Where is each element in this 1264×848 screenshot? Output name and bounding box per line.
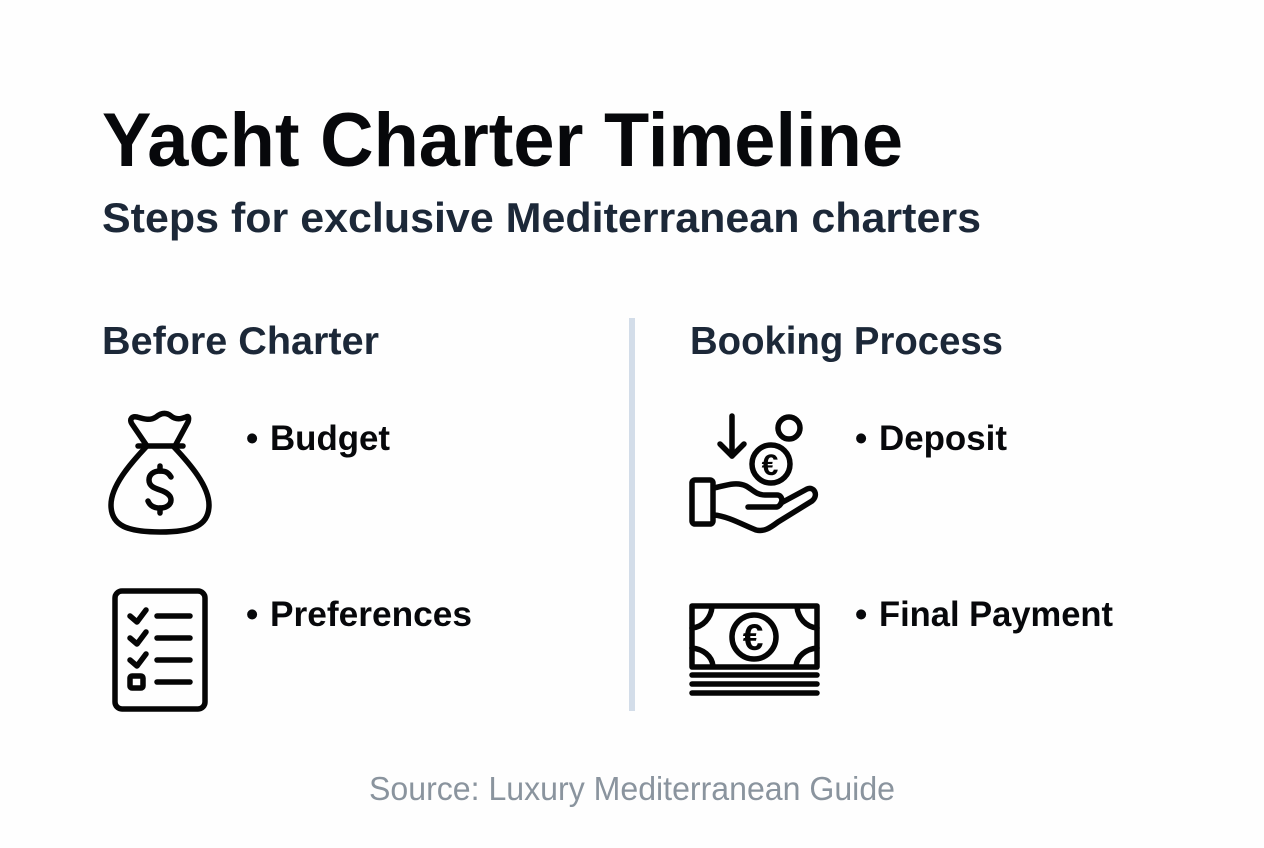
icon: banknote stack: € [743, 617, 763, 658]
heading: booking process: Booking Process [690, 320, 1003, 363]
icon: hand with coins: € [762, 449, 779, 482]
bullet: deposit: Deposit [879, 419, 1007, 458]
bullet: deposit: • [855, 419, 867, 458]
source note: Source: Luxury Mediterranean Guide [369, 770, 895, 807]
subtitle: Steps for exclusive Mediterranean charters [102, 194, 981, 241]
heading: before charter: Before Charter [102, 320, 379, 363]
icon: checklist [115, 591, 205, 709]
bullet: final payment: Final Payment [879, 595, 1113, 634]
column divider [629, 318, 635, 711]
bullet: final payment: • [855, 595, 867, 634]
bullet: budget: • [246, 419, 258, 458]
icon: banknote stack [692, 606, 817, 693]
bullet: preferences: Preferences [270, 595, 472, 634]
bullet: budget: Budget [270, 419, 390, 458]
title: Yacht Charter Timeline [102, 98, 903, 183]
icon: money bag [111, 413, 209, 532]
icon: hand with coins [692, 416, 815, 531]
bullet: preferences: • [246, 595, 258, 634]
